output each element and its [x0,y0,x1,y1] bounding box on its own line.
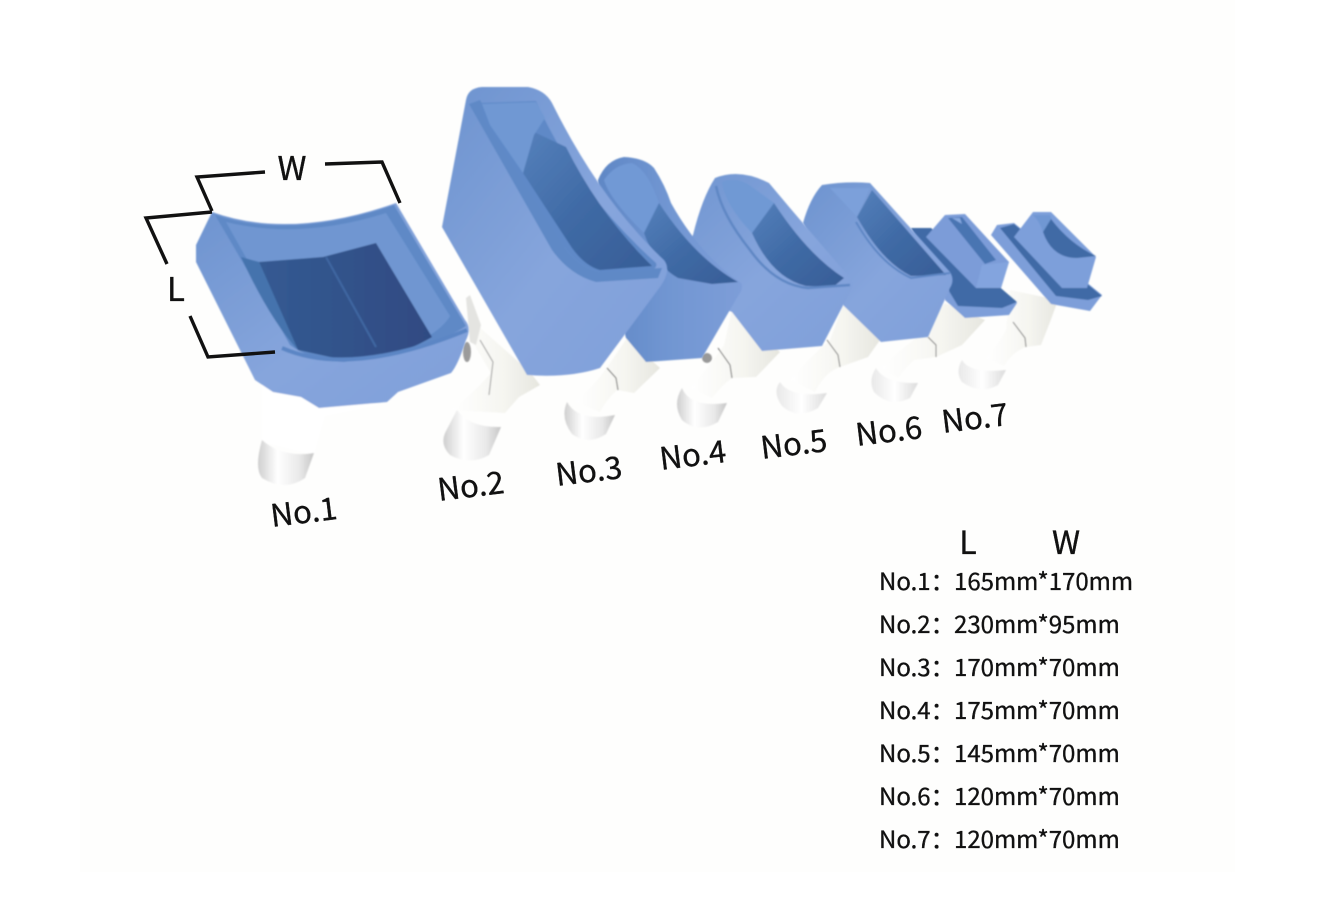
row No.4: 175mm*70mm [954,691,1120,726]
dimension letter W: W [278,142,307,190]
cup No.6 [871,214,1017,402]
row No.7: 120mm*70mm [954,820,1120,855]
table header L: L [959,518,977,564]
table header W: W [1052,518,1080,564]
row No.1: No.1： [879,562,955,597]
dimension bracket L [146,212,275,357]
dimension bracket W [197,162,400,211]
cup No.3 [564,157,742,440]
row No.1: 165mm*170mm [954,562,1133,597]
product row: seven cups [196,87,1102,485]
row No.4: No.4： [879,691,955,726]
cup No.5 [776,182,952,414]
row No.5: No.5： [879,734,955,769]
cup No.2 [442,87,667,460]
size table [879,518,1133,855]
label No.5: No.5 [758,415,829,468]
row No.5: 145mm*70mm [954,734,1120,769]
dimension letter L: L [167,263,185,311]
row No.7: No.7： [879,820,955,855]
label No.6: No.6 [853,402,924,455]
cup No.7 [958,212,1102,389]
row No.2: No.2： [879,605,955,640]
row No.3: No.3： [879,648,955,683]
label No.2: No.2 [435,457,506,510]
row No.2: 230mm*95mm [954,605,1120,640]
label No.1: No.1 [268,483,339,536]
cup No.4 [660,174,853,428]
label No.4: No.4 [657,426,728,479]
row No.6: No.6： [879,777,955,812]
cup No.1 [196,203,469,485]
label No.3: No.3 [553,442,624,495]
row No.3: 170mm*70mm [954,648,1120,683]
label No.7: No.7 [939,389,1010,442]
row No.6: 120mm*70mm [954,777,1120,812]
